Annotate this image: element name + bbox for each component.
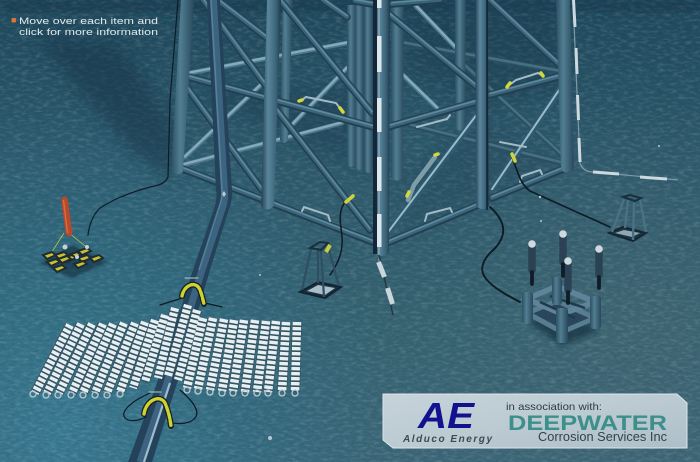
back legs	[280, 0, 466, 180]
logo: Alduco Energy	[402, 395, 492, 445]
logo: Deepwater: Corrosion Services Inc	[538, 429, 668, 444]
main jacket legs	[171, 0, 574, 256]
anode sled below centre leg	[378, 255, 393, 315]
instruction text	[12, 16, 158, 38]
anode mat on pipeline	[30, 305, 298, 398]
instruction text: click for more information	[19, 27, 158, 38]
cage anode: centre	[300, 242, 341, 298]
instruction text: Move over each item and	[19, 16, 158, 27]
association text: in association with:	[506, 401, 602, 413]
logo banner	[383, 394, 687, 448]
logo: Alduco Energy: AE	[417, 395, 475, 436]
pipeline clamps with cables	[124, 278, 222, 426]
anode rack: lower right	[522, 230, 603, 346]
back frame: far light braces	[183, 2, 563, 165]
sacrificial anode sled: left	[40, 200, 108, 278]
orange bullet	[12, 18, 16, 22]
cage anode: right	[609, 195, 646, 241]
anode string right of jacket	[573, 0, 678, 180]
cables	[88, 0, 610, 302]
main frame: braces	[180, 0, 568, 243]
cast shadows on seabed	[0, 0, 700, 240]
seabed pebbles	[259, 145, 660, 440]
logo: Deepwater	[508, 412, 668, 444]
white anodes on centre leg	[377, 0, 382, 262]
logo: Deepwater: DEEPWATER	[508, 412, 667, 435]
pipeline riser and seabed pipeline	[128, 0, 232, 462]
logo: Alduco Energy: Alduco Energy	[402, 434, 492, 445]
brackets and yellow connectors on braces	[299, 73, 543, 221]
